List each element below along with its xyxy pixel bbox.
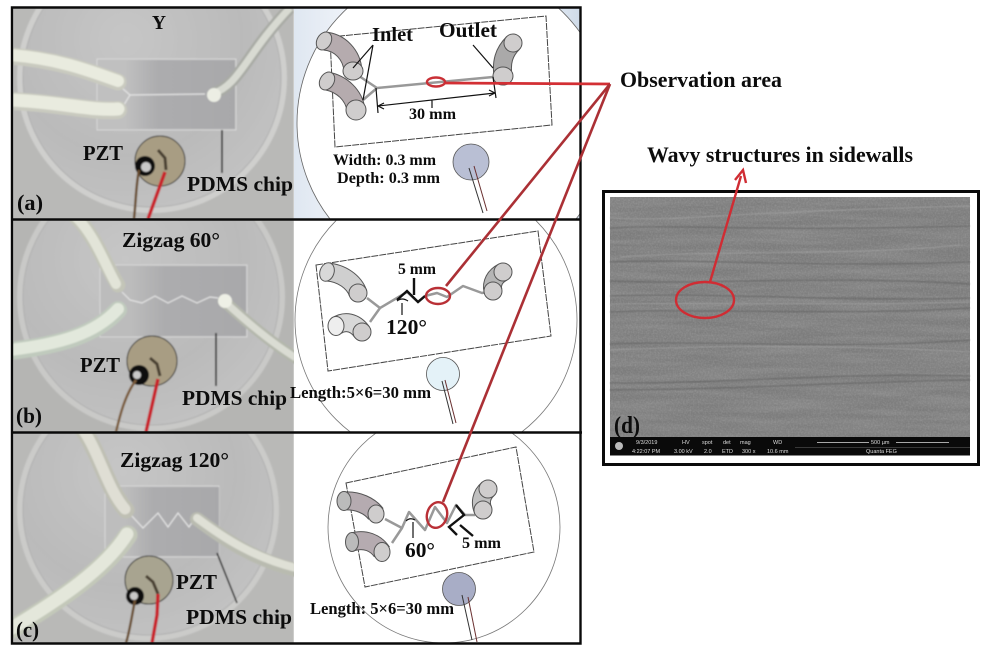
panel a photo: Y channel chip xyxy=(10,0,294,219)
SEM data bar: WD xyxy=(773,440,782,446)
icon: PZT disc schematic xyxy=(442,572,477,642)
label: (b): (b) xyxy=(16,403,42,428)
arrow and circle: wavy structure callout xyxy=(676,170,746,318)
icon: inlet tube lower xyxy=(316,69,366,120)
SEM data bar: HV xyxy=(682,440,690,446)
label: PDMS chip a: PDMS chip xyxy=(187,172,293,196)
panel c diagram: zigzag 120 schematic xyxy=(328,434,560,642)
label: Depth: Depth: 0.3 mm xyxy=(337,170,441,187)
dimension: 5 mm bracket xyxy=(449,505,473,536)
SEM data bar: Quanta FEG xyxy=(866,449,897,455)
heading: Y: Y xyxy=(152,12,167,34)
SEM data bar: 500 µm xyxy=(871,440,890,446)
SEM data bar: spot xyxy=(702,440,713,446)
icon: PZT disc xyxy=(125,556,173,643)
SEM data bar: 9/3/2019 xyxy=(636,440,657,446)
label: (c): (c) xyxy=(16,617,39,642)
SEM data bar: ETD xyxy=(722,449,733,455)
icon: PZT disc xyxy=(134,136,185,219)
dimension: 5 mm bracket xyxy=(397,278,425,302)
panel b diagram: zigzag 60 schematic xyxy=(294,220,578,432)
label: PDMS chip b: PDMS chip xyxy=(182,386,287,410)
label: (d): (d) xyxy=(614,413,640,439)
dimension: 30 mm xyxy=(376,77,496,113)
SEM data bar: 2.0 xyxy=(704,449,712,455)
label: Length b: Length:5×6=30 mm xyxy=(290,383,431,402)
icon: inlet tube lower xyxy=(328,316,371,341)
label: Outlet: Outlet xyxy=(439,18,497,42)
heading: Zigzag 120°: Zigzag 120° xyxy=(120,448,229,472)
SEM micrograph xyxy=(610,197,970,437)
angle marker: 120° xyxy=(397,299,408,315)
label: PZT b: PZT xyxy=(80,353,120,377)
SEM data bar: 4:22:07 PM xyxy=(632,449,661,455)
SEM data bar xyxy=(610,437,970,456)
panel d: SEM image xyxy=(604,192,978,464)
icon: outlet tube xyxy=(484,263,512,300)
callout lines: observation area connectors xyxy=(424,78,610,530)
icon: inlet tube lower xyxy=(346,532,390,562)
icon: inlet tube upper xyxy=(337,492,384,523)
icon: outlet tube xyxy=(474,480,497,519)
label: 60°: 60° xyxy=(405,538,435,562)
label: PZT a: PZT xyxy=(83,141,123,165)
icon: inlet tube upper xyxy=(317,261,367,302)
label: Inlet: Inlet xyxy=(372,24,413,46)
SEM data bar: det xyxy=(723,440,731,446)
label: (a): (a) xyxy=(17,190,43,215)
angle marker: 60° xyxy=(406,519,415,538)
label: 30 mm: 30 mm xyxy=(409,106,457,123)
heading: Observation area: Observation area xyxy=(620,68,782,92)
heading: Wavy structures in sidewalls: Wavy structures in sidewalls xyxy=(647,143,913,167)
icon: PZT disc schematic xyxy=(453,144,489,213)
arrows: inlet and outlet pointers xyxy=(353,45,493,100)
panel a diagram: Y channel schematic xyxy=(294,8,580,218)
SEM data bar: 10.6 mm xyxy=(767,449,789,455)
SEM data bar: 3.00 kV xyxy=(674,449,693,455)
SEM data bar: 300 x xyxy=(742,449,756,455)
icon: PZT disc xyxy=(116,336,177,432)
icon: inlet tube upper xyxy=(313,29,363,80)
label: 5 mm b: 5 mm xyxy=(398,261,436,278)
label: PZT c: PZT xyxy=(176,570,217,594)
panel b photo: zigzag 60 chip xyxy=(13,220,294,432)
label: PDMS chip c: PDMS chip xyxy=(186,605,292,629)
icon: PZT disc schematic xyxy=(426,358,460,424)
heading: Zigzag 60°: Zigzag 60° xyxy=(122,228,220,252)
label: 5 mm c: 5 mm xyxy=(462,535,502,552)
panel c photo: zigzag 120 chip xyxy=(13,434,294,642)
SEM data bar: mag xyxy=(740,440,751,446)
label: Length c: Length: 5×6=30 mm xyxy=(310,599,454,618)
icon: outlet tube xyxy=(493,34,522,85)
label: Width: Width: 0.3 mm xyxy=(333,152,437,169)
label: 120°: 120° xyxy=(386,315,427,339)
panel frame: outer borders of panels a to c xyxy=(12,8,582,644)
